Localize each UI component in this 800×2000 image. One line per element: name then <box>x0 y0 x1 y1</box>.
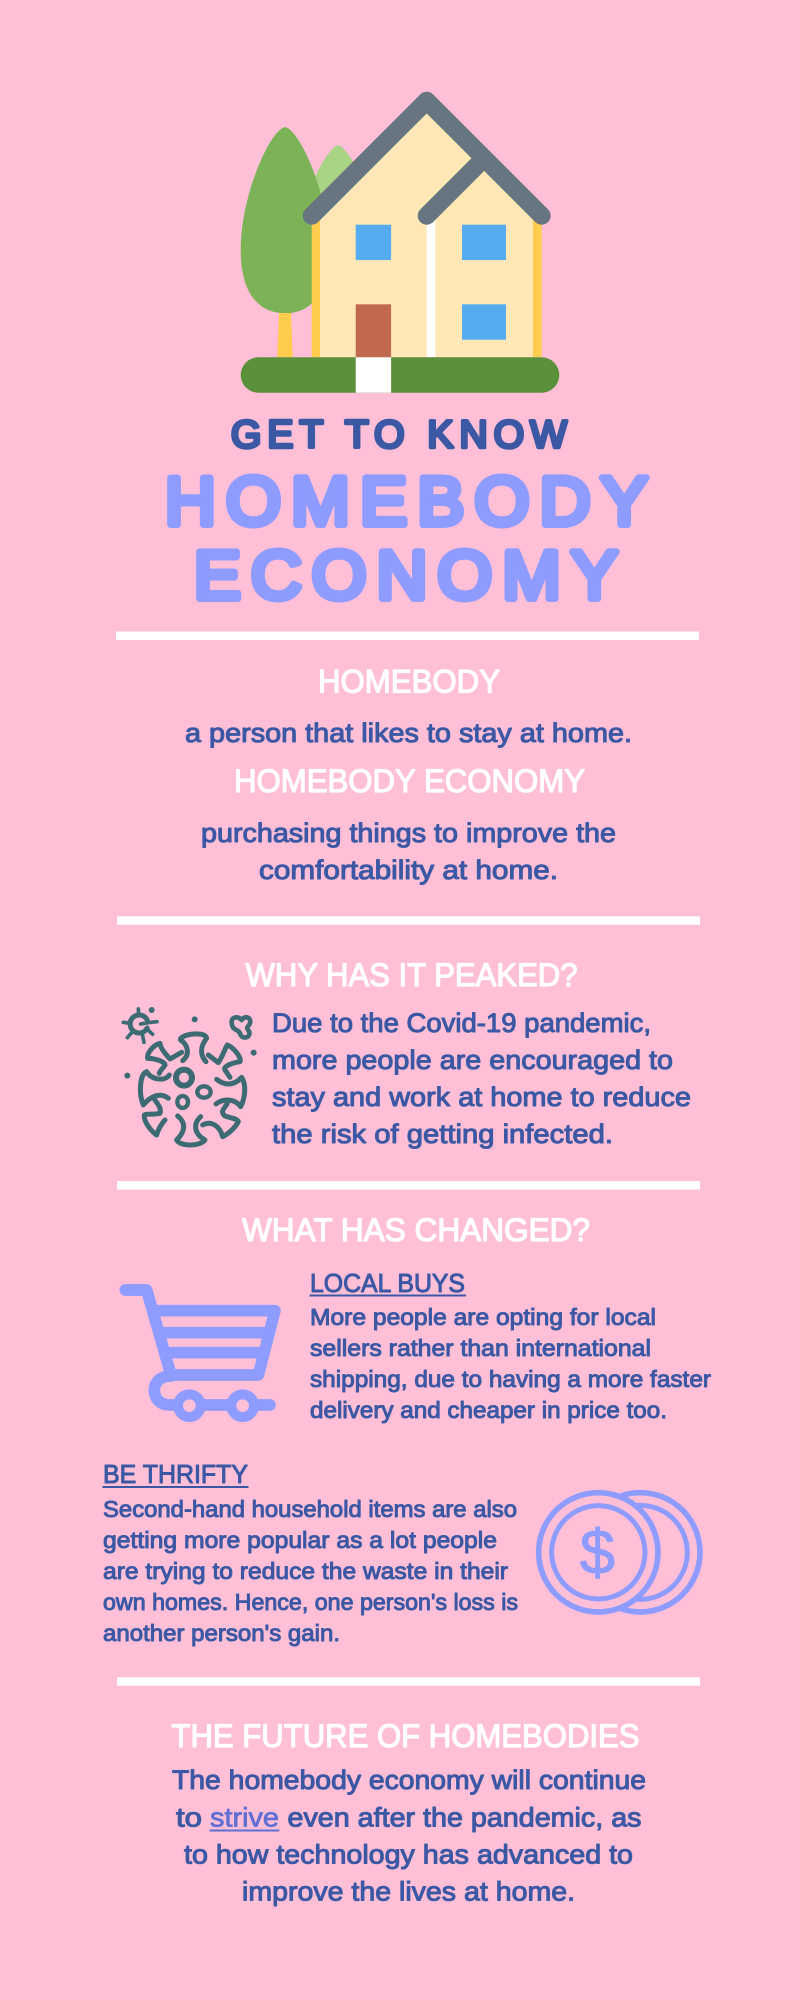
icon: house with trees <box>241 101 559 393</box>
panel: why has it peaked <box>123 957 691 1149</box>
text: future body: strive <box>210 1802 279 1832</box>
text: future body: even after the pandemic, as <box>288 1802 642 1832</box>
text: homebody economy definition: purchasing things to improve the <box>201 818 616 848</box>
text: local buys body <box>310 1304 711 1423</box>
text: why has it peaked body <box>272 1008 691 1149</box>
heading: homebody economy: HOMEBODY ECONOMY <box>234 763 585 799</box>
text: homebody definition: a person that likes to stay at home. <box>185 718 632 748</box>
heading: homebody: HOMEBODY <box>318 664 500 700</box>
text: why has it peaked body: Due to the Covid-19 pandemic, <box>272 1008 651 1038</box>
text: homebody economy definition <box>201 818 616 885</box>
text: be thrifty body: another person's gain. <box>103 1620 340 1646</box>
icon: shopping cart <box>125 1290 275 1417</box>
text: be thrifty body: own homes. Hence, one person's loss is <box>103 1589 518 1615</box>
panel: the future of homebodies <box>172 1718 646 1906</box>
text: local buys body: More people are opting for local <box>310 1304 656 1330</box>
text: local buys body: shipping, due to having a more faster <box>310 1366 711 1392</box>
panel: definitions <box>185 664 632 885</box>
text: local buys body: delivery and cheaper in price too. <box>310 1397 667 1423</box>
text: why has it peaked body: more people are encouraged to <box>272 1045 673 1075</box>
text: future body <box>172 1765 646 1906</box>
text: local buys body: sellers rather than international <box>310 1335 651 1361</box>
text: be thrifty body: are trying to reduce the waste in their <box>103 1558 508 1584</box>
title <box>165 414 658 614</box>
title line: get to know: GET TO KNOW <box>231 414 573 456</box>
text: future body: to how technology has advanced to <box>184 1840 633 1870</box>
icon: coins <box>539 1493 700 1612</box>
text: be thrifty body: getting more popular as a lot people <box>103 1527 497 1553</box>
text: homebody economy definition: comfortability at home. <box>259 855 558 885</box>
heading: why has it peaked: WHY HAS IT PEAKED? <box>246 957 578 993</box>
subheading: be thrifty: BE THRIFTY <box>103 1459 248 1489</box>
title line: homebody: HOMEBODY <box>165 464 658 540</box>
text: be thrifty body: Second-hand household items are also <box>103 1496 517 1522</box>
title line: economy: ECONOMY <box>194 538 628 614</box>
heading: the future of homebodies: THE FUTURE OF HOMEBODIES <box>172 1718 640 1754</box>
text: why has it peaked body: stay and work at home to reduce <box>272 1082 691 1112</box>
icon: virus <box>123 1007 257 1145</box>
heading: what has changed: WHAT HAS CHANGED? <box>242 1212 590 1248</box>
icon: coins: $ <box>580 1518 615 1588</box>
text: be thrifty body <box>103 1496 518 1646</box>
text: future body: improve the lives at home. <box>242 1876 575 1906</box>
subheading: local buys: LOCAL BUYS <box>310 1268 465 1298</box>
panel: what has changed <box>102 1212 711 1646</box>
text: future body: The homebody economy will continue <box>172 1765 646 1795</box>
text: why has it peaked body: the risk of getting infected. <box>272 1119 613 1149</box>
text: future body: to <box>176 1802 202 1832</box>
